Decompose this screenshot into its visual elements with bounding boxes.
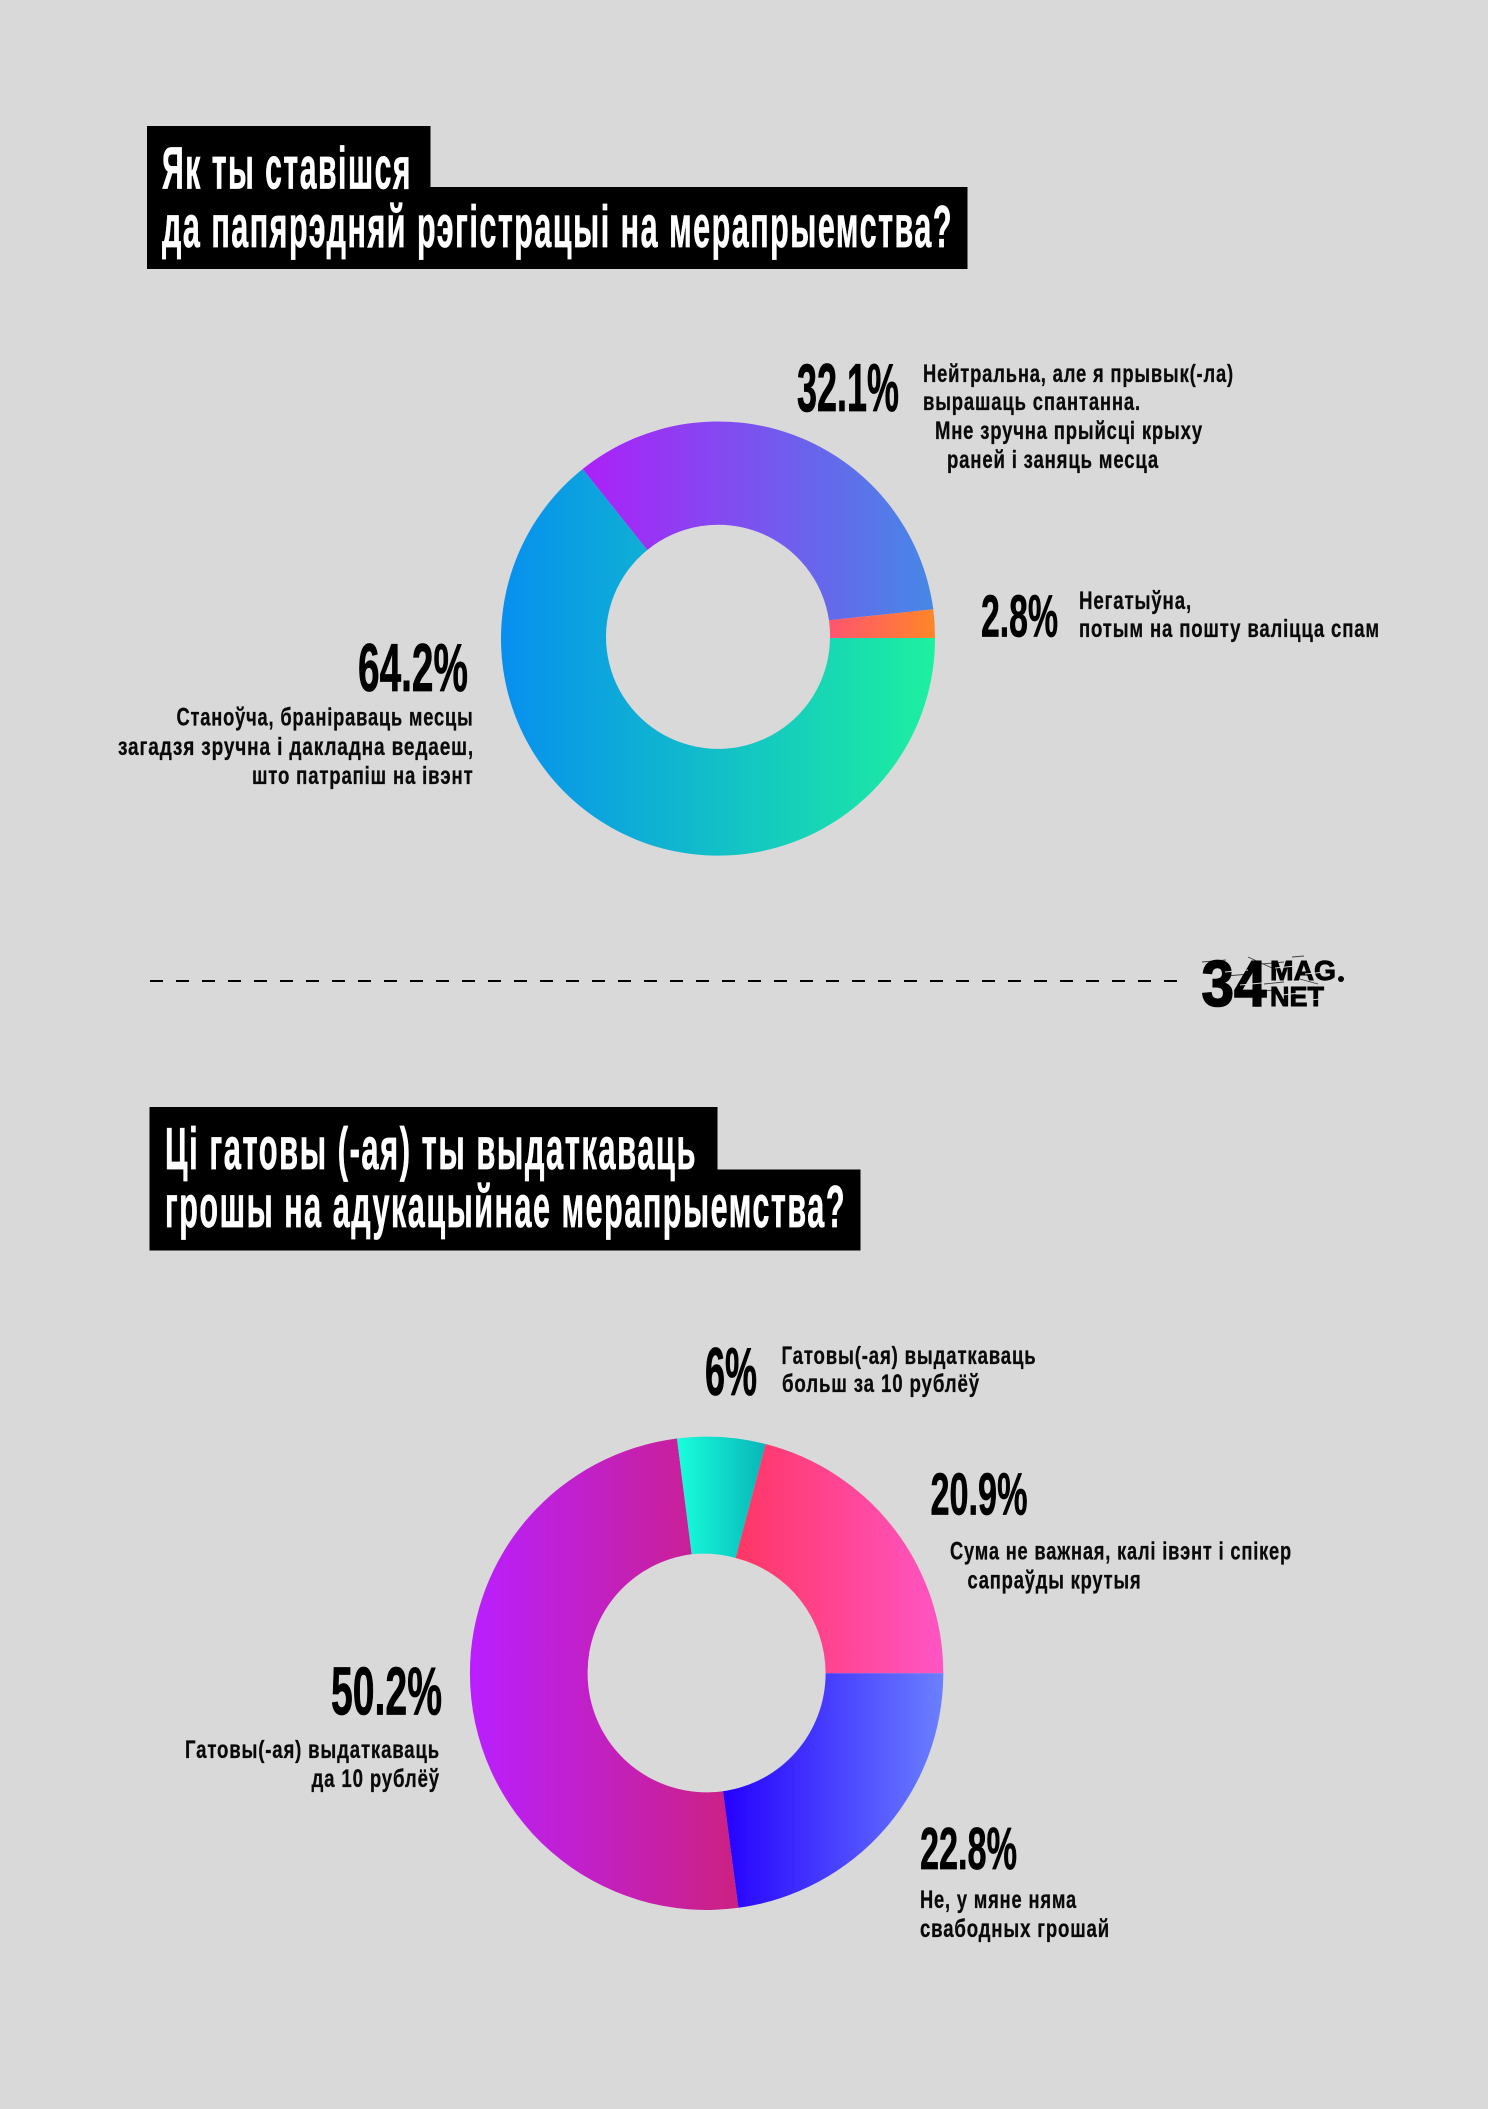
donut chart: question 1 — [501, 421, 935, 856]
heading: question 1 — [147, 126, 968, 269]
callout: 32.1% neutral: вырашаць спантанна. — [923, 388, 1141, 416]
callout: 22.8% no spare money: 22.8% — [920, 1816, 1017, 1882]
callout: 50.2% up to 10 roubles: 50.2% — [331, 1654, 442, 1730]
logo: 34mag.net: MAG — [1270, 955, 1336, 986]
callout: 20.9% amount does not matter: 20.9% — [930, 1462, 1028, 1528]
callout: 2.8% negative: потым на пошту валіцца спам — [1079, 615, 1380, 643]
logo: 34mag.net — [1202, 947, 1344, 1020]
heading: question 2: Ці гатовы (-ая) ты выдаткаваць — [165, 1116, 697, 1182]
callout: 20.9% amount does not matter: сапраўды крутыя — [968, 1566, 1142, 1594]
callout: 32.1% neutral: Мне зручна прыйсці крыху — [935, 417, 1203, 445]
callout: 20.9% amount does not matter: Сума не важная, калі івэнт і спікер — [950, 1538, 1292, 1566]
callout: 22.8% no spare money: Не, у мяне няма — [920, 1886, 1077, 1914]
callout: 2.8% negative: 2.8% — [981, 584, 1058, 650]
callout: 64.2% positive — [118, 630, 474, 790]
callout: 6% over 10 roubles: больш за 10 рублёў — [782, 1370, 980, 1398]
callout: 64.2% positive: што патрапіш на івэнт — [252, 762, 474, 790]
callout: 2.8% negative: Негатыўна, — [1079, 587, 1192, 615]
callout: 20.9% amount does not matter — [930, 1462, 1292, 1594]
heading: question 1: Як ты ставішся — [162, 136, 412, 202]
callout: 6% over 10 roubles: Гатовы(-ая) выдаткаваць — [782, 1342, 1036, 1370]
heading: question 2: грошы на адукацыйнае мерапрыемства? — [165, 1174, 846, 1240]
callout: 32.1% neutral: Нейтральна, але я прывык(-ла) — [923, 360, 1234, 388]
callout: 50.2% up to 10 roubles: Гатовы(-ая) выдаткаваць — [185, 1736, 440, 1764]
callout: 64.2% positive: загадзя зручна і дакладна ведаеш, — [118, 733, 474, 761]
callout: 22.8% no spare money: свабодных грошай — [920, 1915, 1110, 1943]
donut chart: question 2 — [470, 1437, 943, 1910]
callout: 64.2% positive: 64.2% — [358, 630, 468, 706]
callout: 50.2% up to 10 roubles: да 10 рублёў — [312, 1765, 440, 1793]
callout: 32.1% neutral: 32.1% — [797, 350, 899, 426]
callout: 32.1% neutral — [797, 350, 1234, 474]
callout: 64.2% positive: Станоўча, браніраваць месцы — [176, 704, 474, 732]
logo: 34mag.net: NET — [1270, 981, 1324, 1012]
callout: 6% over 10 roubles — [705, 1334, 1036, 1410]
callout: 50.2% up to 10 roubles — [185, 1654, 442, 1793]
callout: 6% over 10 roubles: 6% — [705, 1334, 757, 1410]
heading: question 2 — [150, 1107, 860, 1250]
logo: 34mag.net: 34 — [1202, 947, 1266, 1020]
callout: 32.1% neutral: раней і заняць месца — [947, 446, 1159, 474]
callout: 22.8% no spare money — [920, 1816, 1110, 1943]
callout: 2.8% negative — [981, 584, 1380, 650]
